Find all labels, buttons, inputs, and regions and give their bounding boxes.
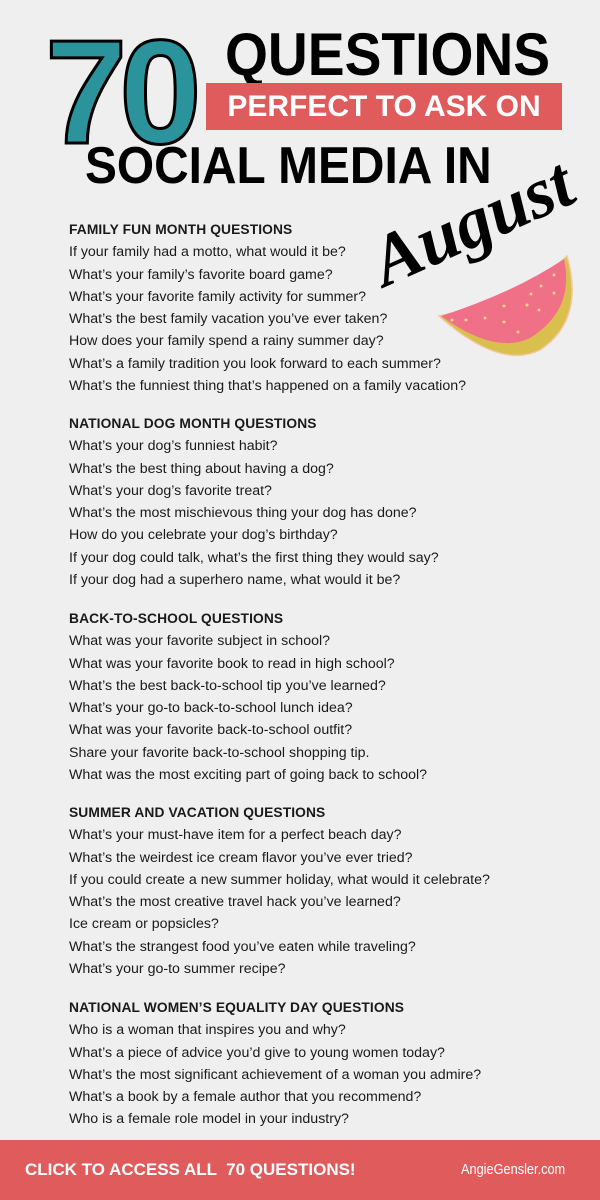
footer banner [0,1140,600,1200]
title banner: perfect to ask on: PERFECT TO ASK ON [227,90,541,123]
section: summer and vacation: Ice cream or popsicles? [69,916,219,932]
section: women's equality day: NATIONAL WOMEN’S EQUALITY DAY QUESTIONS [69,1000,404,1015]
section: national dog month: If your dog had a superhero name, what would it be? [69,572,400,588]
section: back-to-school: What’s your go-to back-to-school lunch idea? [69,700,353,716]
section: national dog month: What’s the most mischievous thing your dog has done? [69,505,417,521]
section: national dog month: What’s your dog’s favorite treat? [69,483,272,499]
title: 70: 70 [45,10,194,175]
section: women's equality day: What’s a book by a female author that you recommend? [69,1089,421,1105]
section: national dog month: If your dog could talk, what’s the first thing they would say? [69,550,439,566]
section: summer and vacation: SUMMER AND VACATION QUESTIONS [69,805,325,820]
icon: watermelon [438,254,573,356]
section: national dog month: NATIONAL DOG MONTH QUESTIONS [69,416,317,431]
section: family fun month: What’s the best family vacation you’ve ever taken? [69,311,387,327]
section: summer and vacation [69,805,490,977]
section: family fun month [69,222,466,394]
section: family fun month: What’s your family’s favorite board game? [69,267,333,283]
section: family fun month: What’s the funniest thing that’s happened on a family vacation? [69,378,466,394]
section: back-to-school [69,611,427,783]
title banner: perfect to ask on [206,83,562,130]
section: summer and vacation: What’s the strangest food you’ve eaten while traveling? [69,939,416,955]
section: back-to-school: What was your favorite subject in school? [69,633,330,649]
title: QUESTIONS: QUESTIONS [225,21,550,88]
section: women's equality day: What’s the most significant achievement of a woman you admire? [69,1067,481,1083]
section: back-to-school: What was your favorite book to read in high school? [69,656,395,672]
section: women's equality day [69,1000,481,1127]
script: August: August [359,142,585,302]
section: national dog month: What’s the best thing about having a dog? [69,461,334,477]
section: back-to-school: What’s the best back-to-school tip you’ve learned? [69,678,386,694]
section: summer and vacation: What’s the most creative travel hack you’ve learned? [69,894,401,910]
section: family fun month: How does your family spend a rainy summer day? [69,333,384,349]
footer site: AngieGensler.com [461,1161,565,1178]
section: family fun month: If your family had a motto, what would it be? [69,244,346,260]
section: national dog month: How do you celebrate your dog’s birthday? [69,527,338,543]
title: social media in: SOCIAL MEDIA IN [85,137,492,195]
section: summer and vacation: What’s your go-to summer recipe? [69,961,286,977]
section: family fun month: What’s your favorite family activity for summer? [69,289,366,305]
section: family fun month: FAMILY FUN MONTH QUESTIONS [69,222,292,237]
section: women's equality day: Who is a woman that inspires you and why? [69,1022,346,1038]
section: women's equality day: Who is a female role model in your industry? [69,1111,349,1127]
footer cta: CLICK TO ACCESS ALL 70 QUESTIONS! [25,1160,356,1179]
section: women's equality day: What’s a piece of advice you’d give to young women today? [69,1045,445,1061]
section: back-to-school: What was the most exciting part of going back to school? [69,767,427,783]
section: back-to-school: BACK-TO-SCHOOL QUESTIONS [69,611,283,626]
section: national dog month [69,416,439,588]
section: summer and vacation: If you could create a new summer holiday, what would it celebrate? [69,872,490,888]
section: family fun month: What’s a family tradition you look forward to each summer? [69,356,441,372]
section: back-to-school: What was your favorite back-to-school outfit? [69,722,352,738]
section: national dog month: What’s your dog’s funniest habit? [69,438,277,454]
section: back-to-school: Share your favorite back-to-school shopping tip. [69,745,369,761]
section: summer and vacation: What’s your must-have item for a perfect beach day? [69,827,402,843]
section: summer and vacation: What’s the weirdest ice cream flavor you’ve ever tried? [69,850,413,866]
